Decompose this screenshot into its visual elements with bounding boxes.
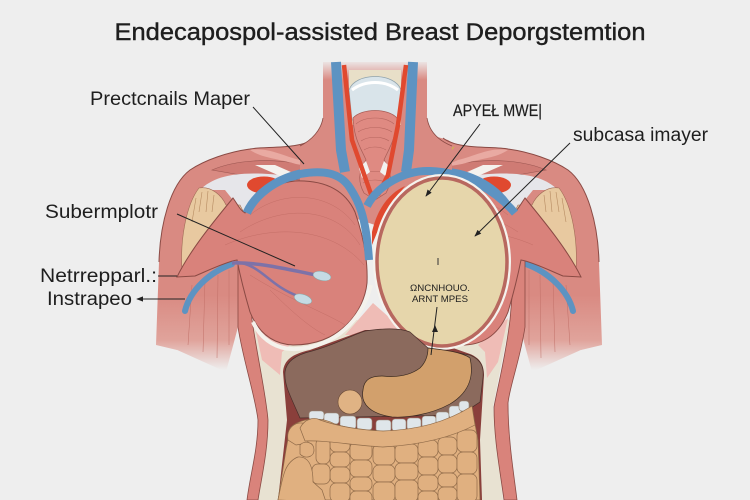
neck xyxy=(300,62,452,225)
title: Endecapospol-assisted Breast Deporgstemtion xyxy=(114,19,646,46)
catheter upper xyxy=(232,263,332,282)
label: Netrrepparl: Netrrepparl.: xyxy=(40,266,157,287)
red artery beside implant xyxy=(372,186,405,245)
label: Instrapeo xyxy=(47,289,185,310)
left subclavian vessel and central vein xyxy=(247,172,369,260)
label: APYEL MWE xyxy=(426,101,542,196)
label: subcasa imayer: subcasa imayer xyxy=(573,125,709,146)
label: implant text and arrow xyxy=(410,283,470,355)
left pectoral muscle xyxy=(177,181,367,345)
right shoulder and arm xyxy=(413,130,602,372)
label: implant text and arrow: ΩNCNHOUO. xyxy=(410,283,470,294)
label: Prectcnails Maper: Prectcnails Maper xyxy=(90,89,251,110)
right subclavian vessel xyxy=(367,171,515,213)
torso wall xyxy=(238,255,525,500)
stomach xyxy=(363,348,471,417)
gallbladder xyxy=(338,390,362,414)
label: Subermplotr: Subermplotr xyxy=(45,202,159,223)
label: Prectcnails Maper xyxy=(90,89,304,164)
catheter lower xyxy=(236,262,313,306)
label: subcasa imayer xyxy=(475,125,709,236)
right pectoral muscle xyxy=(391,181,581,345)
label: Subermplotr xyxy=(45,202,295,266)
label: Instrapeo: Instrapeo xyxy=(47,289,132,310)
left shoulder and arm xyxy=(156,130,345,372)
label: APYEL MWE: APYEŁ MWE| xyxy=(453,101,542,120)
label: implant text and arrow: ARNT MPES xyxy=(412,294,468,305)
omentum band xyxy=(309,401,469,432)
pectoral white border xyxy=(253,285,371,349)
intestines xyxy=(278,406,480,500)
implant xyxy=(373,174,511,350)
liver xyxy=(285,329,483,418)
